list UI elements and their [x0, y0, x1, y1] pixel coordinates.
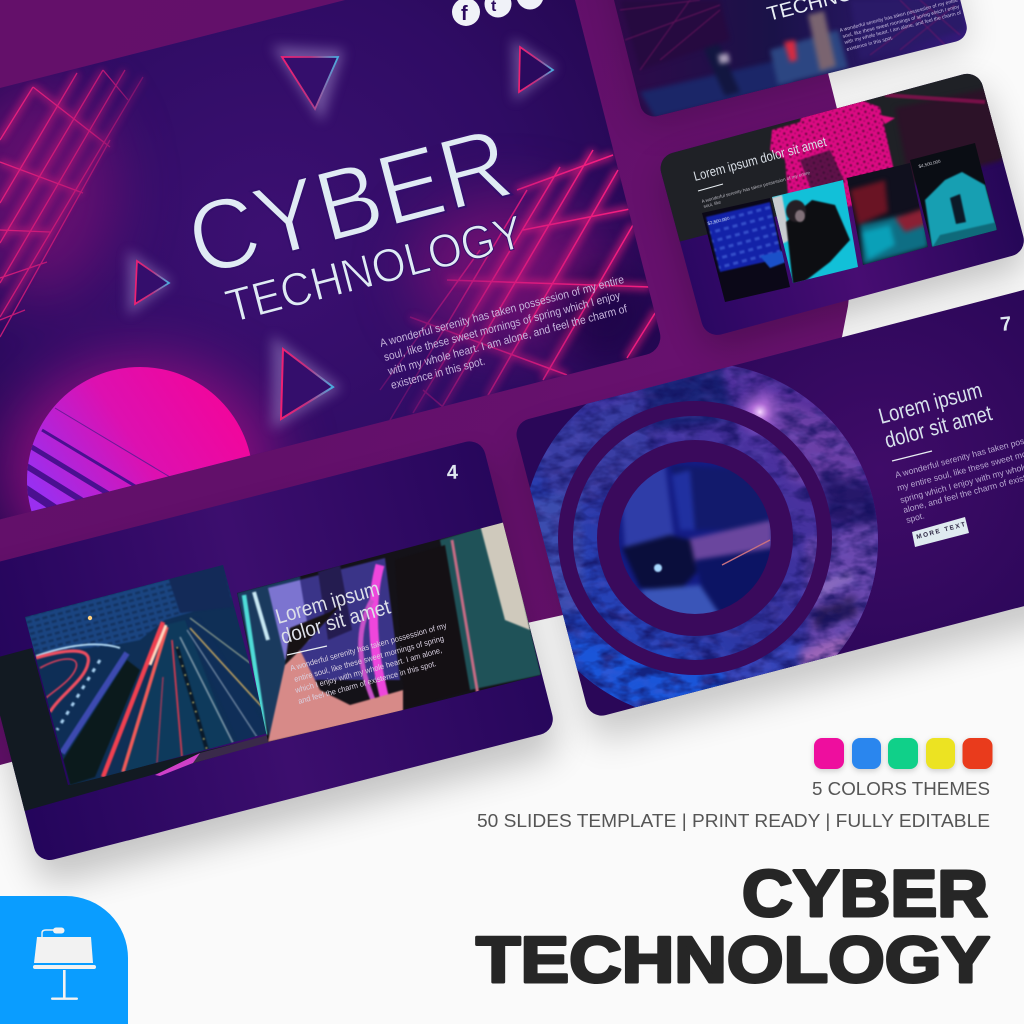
body paragraph — [379, 274, 629, 392]
sun circle with stripes — [27, 367, 250, 512]
panel: four photo slide — [660, 74, 1024, 335]
photo: cyan arch: $4,500,000 — [918, 159, 942, 169]
button: more text — [912, 517, 969, 547]
panel: highway photo slide — [0, 430, 560, 870]
photo: dark red street — [847, 163, 928, 265]
lens: inner street scene — [619, 462, 771, 614]
heading underline — [892, 451, 932, 461]
title: TECHNOLOGY: TECHNOLOGY — [220, 205, 529, 333]
slide heading: dolor sit amet — [278, 596, 393, 649]
color theme swatches — [814, 738, 992, 769]
slide number 7: 7 — [999, 313, 1013, 336]
slide body text: existence in this spot. — [846, 35, 894, 53]
photo: cyan portrait — [772, 180, 858, 283]
slide heading — [876, 377, 995, 453]
body paragraph: A wonderful serenity has taken possession of my entire — [379, 274, 625, 350]
dark band behind photos — [0, 648, 268, 820]
panel: slide 7 shadow — [517, 308, 1024, 741]
pink reflection strip — [155, 753, 200, 776]
slide body text: and feel the charm of existence in this spot. — [297, 659, 437, 706]
magenta grid lines — [620, 0, 960, 70]
corner badge: keynote — [0, 896, 128, 1024]
icon: keynote podium — [33, 928, 96, 1000]
icons: social circles: f — [461, 3, 468, 25]
slide body text: with my whole heart. I am alone, and feel the charm of — [844, 10, 962, 46]
body paragraph: with my whole heart. I am alone, and feel the charm of — [386, 303, 629, 378]
slide body text: soul, like — [703, 199, 722, 209]
ambient magenta glows — [0, 85, 605, 580]
caption: slide features: 50 SLIDES TEMPLATE | PRINT READY | FULLY EDITABLE — [477, 810, 990, 831]
slide background — [0, 0, 680, 540]
title: CYBER: CYBER — [176, 106, 522, 297]
heading: CYBER: CYBER — [742, 856, 988, 930]
slide body text: A wonderful serenity has taken possession of my entire — [701, 170, 811, 204]
slide heading: Lorem ipsum — [273, 577, 382, 629]
slide heading: Lorem ipsum dolor sit amet — [692, 134, 828, 184]
light trail lines — [36, 618, 262, 777]
slide body text — [894, 426, 1024, 525]
circular night street photo — [530, 366, 878, 708]
icons: social circles — [452, 0, 544, 26]
slide body text: which I enjoy with my whole heart. I am alone, — [293, 646, 443, 695]
magenta textured building — [770, 100, 895, 215]
slide body text: entire soul, like these sweet mornings of spring — [293, 634, 445, 684]
slide heading: Lorem ipsum — [876, 377, 985, 429]
dark pools between right grid lines — [560, 270, 650, 360]
panel: slide 4 shadow — [0, 460, 560, 886]
slide body text — [839, 0, 962, 53]
left neon grid — [0, 70, 143, 337]
pink ray — [885, 95, 985, 102]
slide photo background — [614, 0, 967, 116]
panel: slide top right partial — [614, 0, 967, 116]
slide number 4: 4 — [446, 462, 459, 484]
purple backdrop band — [0, 0, 860, 765]
slide heading: dolor sit amet — [882, 400, 995, 453]
street photo patches — [620, 0, 965, 118]
caption: color themes: 5 COLORS THEMES — [812, 778, 990, 799]
heading: TECHNOLOGY: TECHNOLOGY — [476, 923, 990, 996]
button: more text: MORE TEXT — [916, 521, 967, 541]
panel: circular photo slide — [516, 290, 1024, 716]
street lamp glow — [88, 616, 92, 620]
slide upper dark area — [660, 74, 1002, 242]
slide lower purple — [660, 74, 1024, 335]
triangle: lower — [272, 335, 342, 430]
panel: main cyber slide — [0, 0, 680, 600]
slide body text: A wonderful serenity has taken possession of my — [289, 621, 448, 673]
triangle: upper right — [512, 38, 557, 102]
photo: cyan arch — [910, 143, 997, 247]
photo: neon hand — [230, 520, 550, 750]
heading underline — [287, 646, 327, 655]
panel: slide 2 shadow — [598, 0, 970, 129]
muted strip below photos — [190, 735, 270, 764]
photo: blue keyboard: $2,500,000 — [707, 216, 731, 226]
photo: highway light trails — [20, 560, 270, 790]
slide body text: soul, like these sweet mornings of spring which I enjoy — [842, 4, 960, 40]
concentric rings — [566, 408, 824, 668]
slide body text: spot. — [905, 510, 926, 525]
photo: blue keyboard — [702, 198, 790, 302]
panel: slide 6 shadow — [660, 85, 1024, 354]
body paragraph: existence in this spot. — [390, 356, 487, 392]
right neon grid — [380, 150, 657, 420]
triangle: top — [272, 46, 344, 122]
dark maroon shade — [895, 88, 1003, 185]
slide background — [516, 290, 1024, 716]
triangle: left — [128, 250, 172, 316]
body paragraph: soul, like these sweet mornings of spring which I enjoy — [383, 290, 622, 364]
slide body text — [289, 621, 448, 706]
heading underline — [698, 184, 723, 191]
slide background — [0, 430, 560, 870]
